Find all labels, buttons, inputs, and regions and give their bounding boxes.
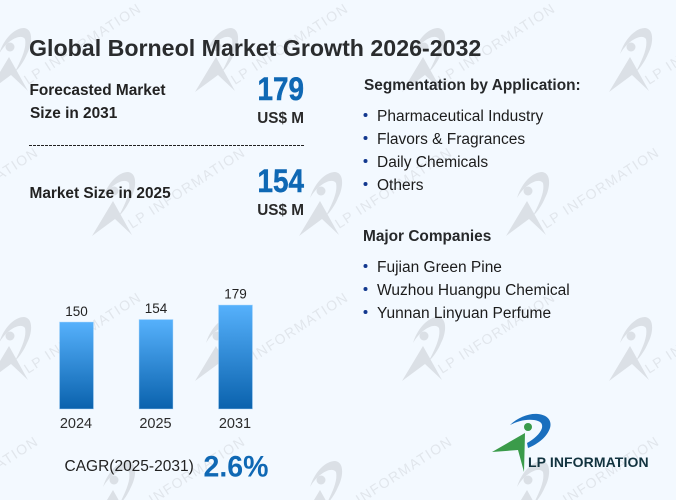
list: applications: Flavors & Fragrances <box>377 131 525 148</box>
icon: blue arc <box>510 414 550 448</box>
panel: market size figures <box>29 72 305 219</box>
list: companies: Yunnan Linyuan Perfume <box>377 305 551 322</box>
title: Global Borneol Market Growth 2026-2032 <box>29 35 481 61</box>
watermark pattern: LP INFORMATION <box>435 0 558 88</box>
value: 154: 154 <box>258 164 304 199</box>
list: applications: Daily Chemicals <box>377 154 488 171</box>
bar: 2025 <box>139 301 173 432</box>
bar: 2031 <box>218 286 252 432</box>
panel: major companies <box>363 228 570 322</box>
watermark pattern: LP INFORMATION <box>332 144 455 232</box>
bar: 2024: 2024 <box>60 416 92 432</box>
bar: 2024: 150 <box>65 304 88 319</box>
list: applications: Pharmaceutical Industry <box>377 108 544 125</box>
unit: 2031 value: US$ M <box>257 110 304 127</box>
logo text: LP INFORMATION <box>528 454 649 470</box>
bar: 2031: 179 <box>224 286 247 302</box>
bar: 2024 <box>60 304 94 432</box>
bar: 2025: 2025 <box>139 416 172 432</box>
heading: segmentation: Segmentation by Application: <box>364 77 581 94</box>
unit: 2025 value: US$ M <box>257 202 304 219</box>
bar chart <box>60 286 252 432</box>
CAGR callout: 2.6% <box>204 451 268 484</box>
label: market size 2025: Market Size in 2025 <box>30 185 171 202</box>
watermark pattern: LP INFORMATION <box>435 289 558 377</box>
watermark pattern: LP INFORMATION <box>125 144 248 232</box>
icon: green arrow <box>492 433 525 472</box>
watermark pattern: LP INFORMATION <box>21 0 144 88</box>
icon: green dot <box>524 423 532 431</box>
list: applications: Others <box>377 177 424 194</box>
label: forecasted market size: Forecasted Market <box>30 82 166 99</box>
logo: LP Information <box>492 414 649 472</box>
CAGR callout: CAGR(2025-2031) <box>64 458 194 475</box>
watermark pattern: LP INFORMATION <box>228 289 351 377</box>
label: forecasted market size: Size in 2031 <box>30 105 118 122</box>
panel: segmentation by application <box>364 77 581 194</box>
CAGR callout <box>64 451 268 484</box>
bar: 2025: 154 <box>145 301 168 316</box>
watermark pattern: LP INFORMATION <box>21 289 144 377</box>
value: 179: 179 <box>258 72 304 107</box>
bar: 2031: 2031 <box>219 416 251 432</box>
watermark pattern: LP INFORMATION <box>228 0 351 88</box>
list: companies: Fujian Green Pine <box>377 259 502 276</box>
list: companies: Wuzhou Huangpu Chemical <box>377 282 570 299</box>
heading: major companies: Major Companies <box>363 228 491 245</box>
watermark pattern: LP INFORMATION <box>539 144 662 232</box>
list: companies <box>364 259 570 322</box>
list: applications <box>364 108 544 194</box>
